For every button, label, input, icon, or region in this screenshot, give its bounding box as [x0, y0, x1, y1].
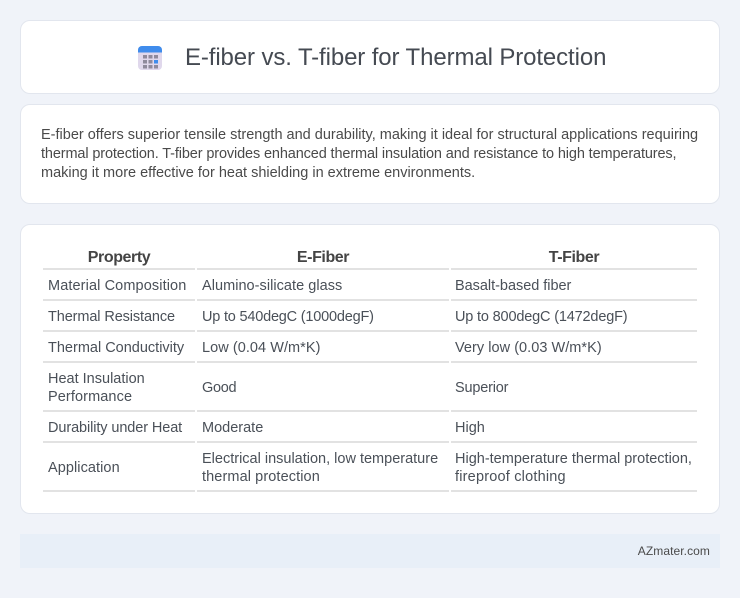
- panel: title card: [20, 20, 720, 94]
- table header: E-Fiber: E-Fiber: [297, 249, 349, 266]
- t-fiber application: [455, 451, 692, 485]
- summary line 3: making it more effective for heat shielding in extreme environments.: [41, 165, 475, 181]
- table header: T-Fiber: T-Fiber: [549, 249, 599, 266]
- e-fiber material: Alumino-silicate glass: [202, 278, 342, 294]
- t-fiber conductivity: Very low (0.03 W/m*K): [455, 340, 602, 356]
- panel: comparison table: [20, 224, 720, 514]
- t-fiber application: fireproof clothing: [455, 469, 566, 485]
- footer bar: [20, 534, 720, 568]
- e-fiber application: thermal protection: [202, 469, 320, 485]
- icon: calendar: [138, 46, 162, 70]
- e-fiber insulation: Good: [202, 380, 236, 396]
- row: thermal conductivity: Thermal Conductivity: [48, 340, 184, 356]
- e-fiber resistance: Up to 540degC (1000degF): [202, 309, 374, 325]
- t-fiber insulation: Superior: [455, 380, 508, 396]
- row: durability under heat: Durability under Heat: [48, 420, 182, 436]
- row: material composition: Material Composition: [48, 278, 186, 294]
- summary line 1: E-fiber offers superior tensile strength and durability, making it ideal for structural applications requiring: [41, 127, 698, 143]
- footer credit: AZmater.com: [638, 544, 710, 558]
- t-fiber resistance: Up to 800degC (1472degF): [455, 309, 627, 325]
- row: heat insulation performance: Performance: [48, 389, 132, 405]
- e-fiber application: Electrical insulation, low temperature: [202, 451, 438, 467]
- row: heat insulation performance: [48, 371, 145, 405]
- t-fiber durability: High: [455, 420, 485, 436]
- title: E-fiber vs. T-fiber for Thermal Protection: [185, 44, 606, 71]
- row: application: Application: [48, 460, 120, 476]
- t-fiber application: High-temperature thermal protection,: [455, 451, 692, 467]
- e-fiber durability: Moderate: [202, 420, 263, 436]
- e-fiber application: [202, 451, 438, 485]
- row: thermal resistance: Thermal Resistance: [48, 309, 175, 325]
- t-fiber material: Basalt-based fiber: [455, 278, 571, 294]
- row: heat insulation performance: Heat Insulation: [48, 371, 145, 387]
- panel: summary text: [20, 104, 720, 204]
- table header: Property: Property: [88, 249, 150, 266]
- e-fiber conductivity: Low (0.04 W/m*K): [202, 340, 320, 356]
- summary line 2: thermal protection. T-fiber provides enhanced thermal insulation and resistance to high temperatures,: [41, 146, 676, 162]
